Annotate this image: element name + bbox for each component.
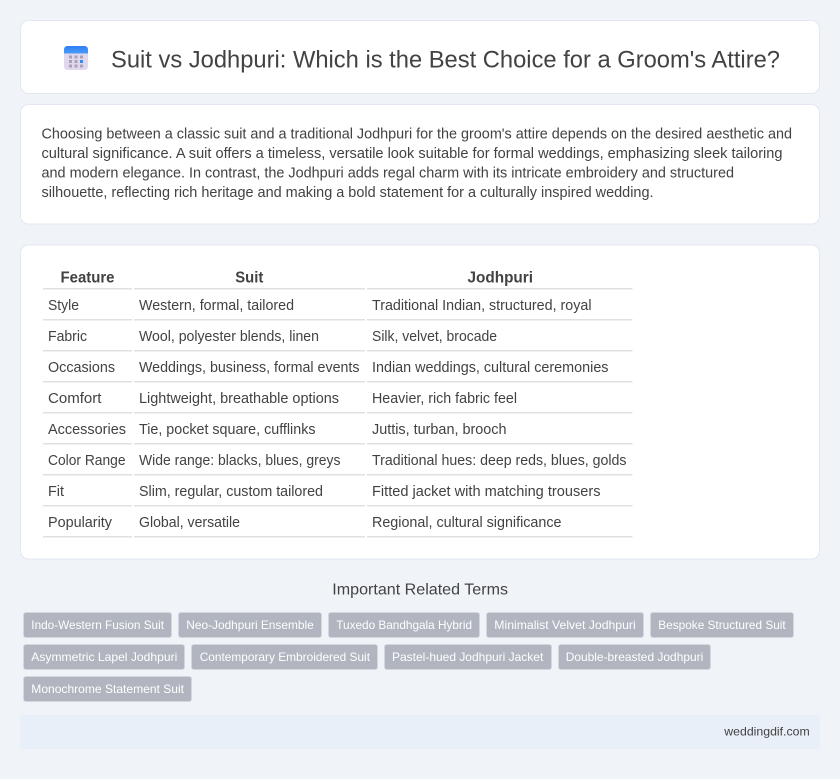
tag xyxy=(178,612,322,638)
table header xyxy=(60,270,533,286)
panel: comparison table xyxy=(20,245,820,559)
tag list: related terms xyxy=(24,612,794,702)
tag: Monochrome Statement Suit xyxy=(31,682,185,696)
panel: intro paragraph xyxy=(20,104,820,224)
row: color range: Color Range xyxy=(48,453,126,469)
tag xyxy=(192,644,378,670)
row: comfort: Lightweight, breathable options xyxy=(139,391,339,407)
row: fit: Fit xyxy=(48,484,64,500)
row: fabric: Fabric xyxy=(48,329,87,345)
row: fabric: Silk, velvet, brocade xyxy=(372,329,497,345)
row: occasions: Occasions xyxy=(48,360,115,376)
tag xyxy=(558,644,710,670)
tag: Tuxedo Bandhgala Hybrid xyxy=(336,618,472,632)
tag: Neo-Jodhpuri Ensemble xyxy=(186,618,314,632)
row: accessories: Tie, pocket square, cufflinks xyxy=(139,422,316,438)
row: style: Style xyxy=(48,298,79,314)
tag xyxy=(24,644,184,670)
table header: Suit xyxy=(235,270,264,286)
row: fabric: Wool, polyester blends, linen xyxy=(139,329,319,345)
row: comfort xyxy=(48,391,517,407)
text block: intro: cultural significance. A suit offers a timeless, versatile look suitable for formal weddings, emphasizing sleek tailoring xyxy=(42,146,782,162)
tag: Indo-Western Fusion Suit xyxy=(31,618,165,632)
text block: intro: Choosing between a classic suit and a traditional Jodhpuri for the groom's attire depends on the desired aesthetic and xyxy=(42,126,792,142)
icon: calendar xyxy=(64,46,88,70)
row: fit: Fitted jacket with matching trousers xyxy=(372,484,600,500)
tag xyxy=(24,676,192,702)
row: occasions: Indian weddings, cultural ceremonies xyxy=(372,360,608,376)
row: color range: Traditional hues: deep reds, blues, golds xyxy=(372,453,626,469)
table header: Feature xyxy=(60,270,115,286)
row: popularity: Global, versatile xyxy=(139,515,240,531)
row: style: Traditional Indian, structured, royal xyxy=(372,298,592,314)
row: comfort: Comfort xyxy=(48,391,102,407)
text block: intro: silhouette, reflecting rich heritage and making a bold statement for a culturally inspired wedding. xyxy=(42,185,654,201)
text block: intro: and modern elegance. In contrast, the Jodhpuri adds regal charm with its intricate embroidery and structured xyxy=(42,166,734,182)
row: fit: Slim, regular, custom tailored xyxy=(139,484,323,500)
tag: Bespoke Structured Suit xyxy=(658,618,786,632)
row: style: Western, formal, tailored xyxy=(139,298,294,314)
tag xyxy=(24,612,172,638)
tag xyxy=(650,612,794,638)
row: comfort: Heavier, rich fabric feel xyxy=(372,391,517,407)
row: accessories xyxy=(48,422,506,438)
row: popularity xyxy=(48,515,562,531)
footer source: weddingdif.com xyxy=(723,725,810,739)
tag xyxy=(328,612,480,638)
title: Suit vs Jodhpuri: Which is the Best Choice for a Groom's Attire? xyxy=(111,46,780,74)
tag: Contemporary Embroidered Suit xyxy=(200,650,371,664)
tag: Double-breasted Jodhpuri xyxy=(566,650,703,664)
tag xyxy=(486,612,644,638)
row: accessories: Juttis, turban, brooch xyxy=(372,422,506,438)
row: popularity: Regional, cultural significance xyxy=(372,515,562,531)
panel: title header xyxy=(20,20,820,94)
footer xyxy=(20,715,820,749)
row: fabric xyxy=(48,329,497,345)
row: fit xyxy=(48,484,600,500)
row: occasions xyxy=(48,360,608,376)
table header: Jodhpuri xyxy=(468,270,533,286)
tag: Minimalist Velvet Jodhpuri xyxy=(494,618,636,632)
heading: related terms: Important Related Terms xyxy=(332,582,508,598)
row: occasions: Weddings, business, formal events xyxy=(139,360,360,376)
row: color range xyxy=(48,453,626,469)
row: popularity: Popularity xyxy=(48,515,113,531)
row: style xyxy=(48,298,592,314)
row: accessories: Accessories xyxy=(48,422,126,438)
text block: intro xyxy=(42,126,792,201)
tag: Asymmetric Lapel Jodhpuri xyxy=(31,650,177,664)
tag xyxy=(384,644,552,670)
row: color range: Wide range: blacks, blues, greys xyxy=(139,453,340,469)
tag: Pastel-hued Jodhpuri Jacket xyxy=(392,650,544,664)
